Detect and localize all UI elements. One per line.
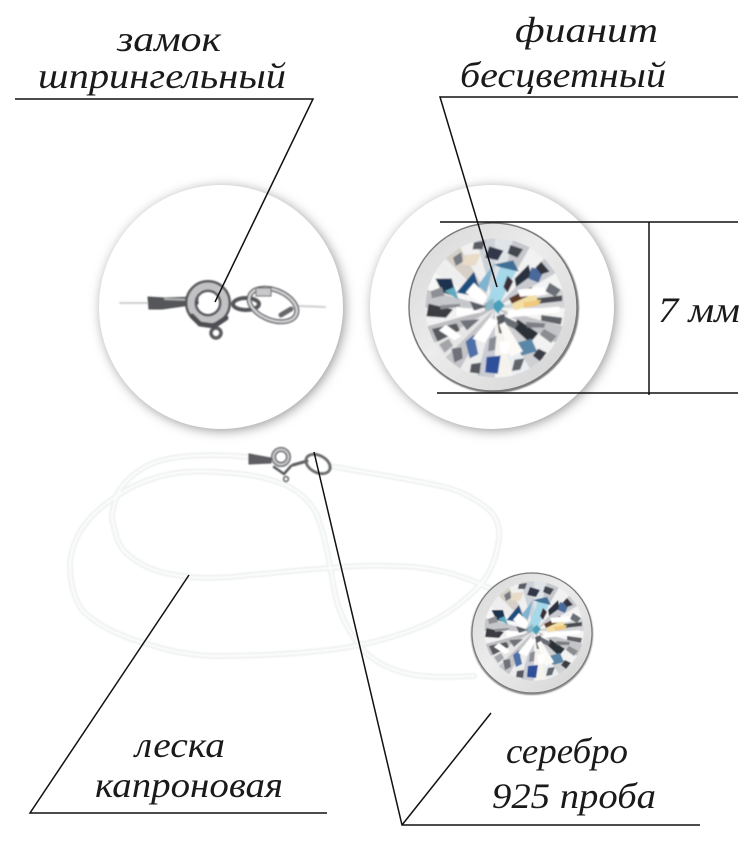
label: clasp: шпрингельный xyxy=(38,56,286,96)
panel: clasp detail circle xyxy=(99,185,344,430)
label: cubic zirconia xyxy=(460,10,666,95)
icon: large gem in bezel xyxy=(409,223,579,393)
label: silver: 925 проба xyxy=(492,776,656,816)
label: cubic zirconia: бесцветный xyxy=(460,55,666,95)
label: cubic zirconia: фианит xyxy=(515,10,658,50)
label: nylon line: капроновая xyxy=(95,765,283,805)
label: silver: серебро xyxy=(506,731,628,771)
label: silver xyxy=(492,731,656,816)
icon: spring ring clasp xyxy=(120,282,325,338)
necklace: transparent fishing line xyxy=(70,455,510,677)
label: clasp: замок xyxy=(116,19,222,59)
icon: small pendant gem xyxy=(471,573,593,695)
panel: gem detail circle xyxy=(370,185,615,430)
label: nylon line: леска xyxy=(133,725,225,765)
label: diameter: 7 мм xyxy=(658,290,740,330)
icon: small clasp on necklace xyxy=(249,450,333,481)
label: clasp xyxy=(38,19,286,96)
label: nylon line xyxy=(95,725,283,805)
